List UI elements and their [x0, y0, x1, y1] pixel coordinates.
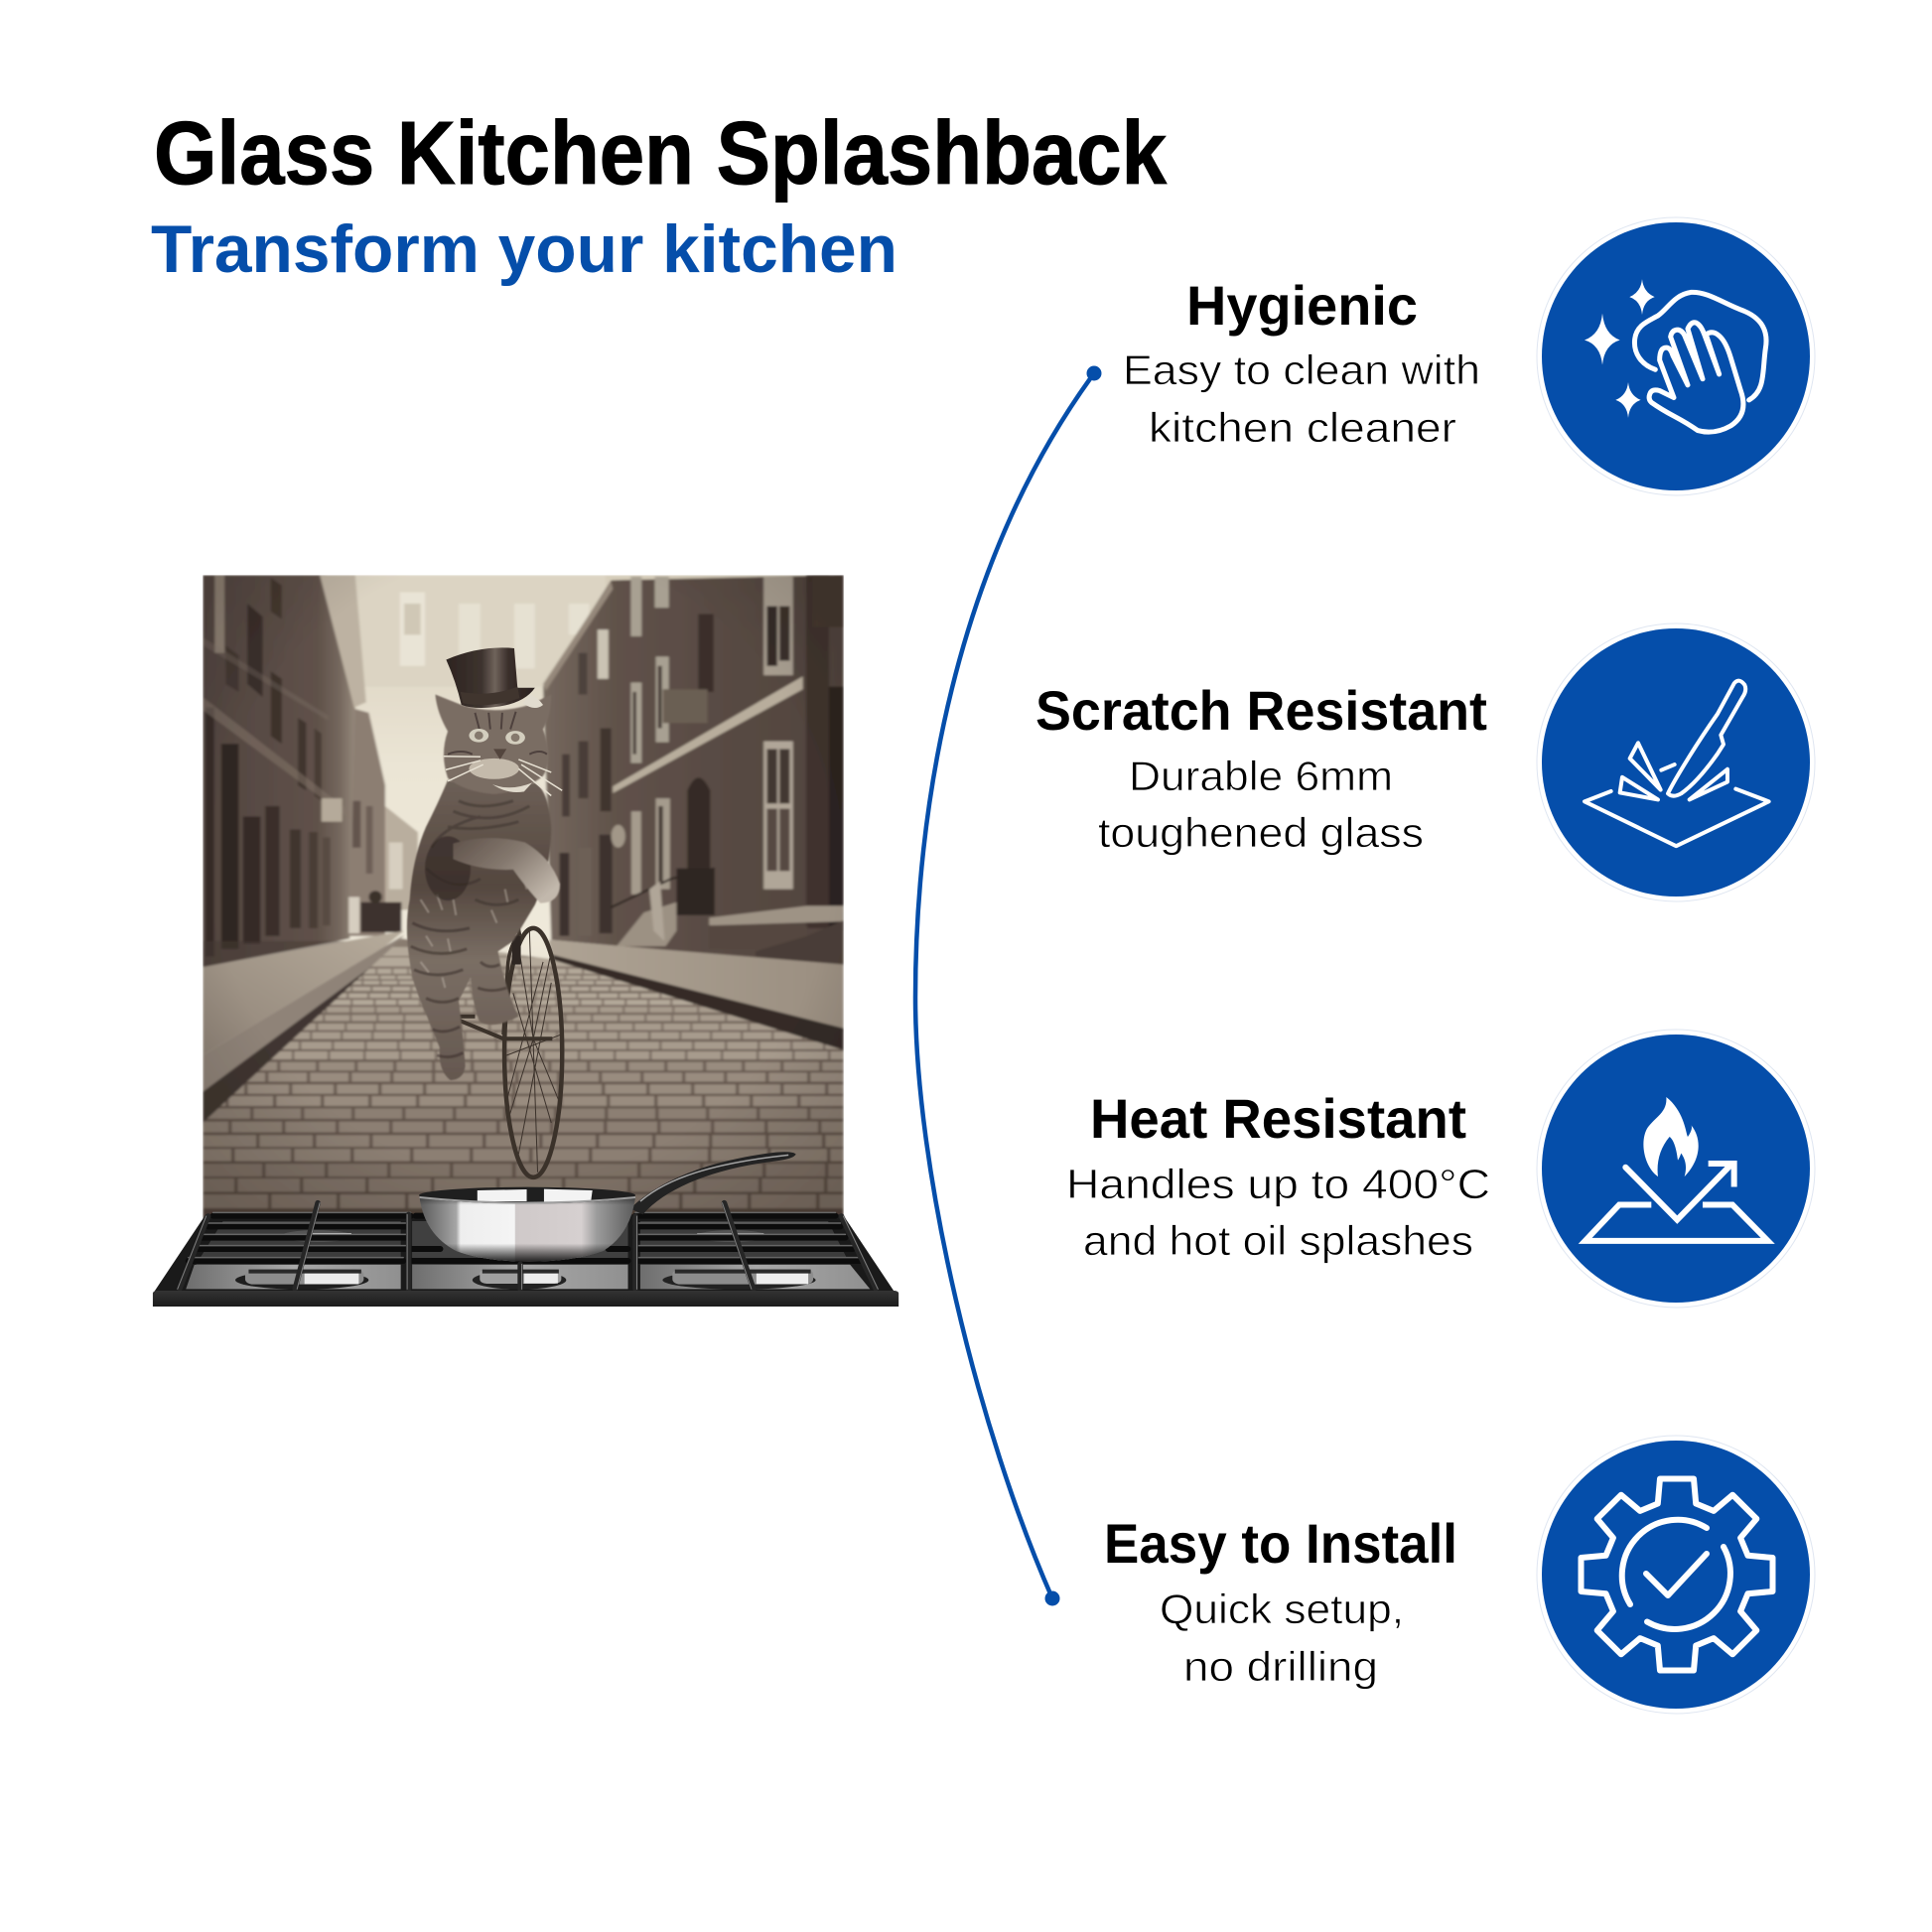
- right sidewalk and curb: [549, 940, 844, 1051]
- heading: Hygienic: [1186, 274, 1418, 337]
- cat fur stripes: [411, 801, 529, 1057]
- description: [1066, 1161, 1490, 1264]
- heading: Easy to Install: [1104, 1512, 1457, 1575]
- title: Glass Kitchen Splashback: [154, 104, 1168, 204]
- icon: gear with check mark: [1537, 1436, 1815, 1714]
- top hat: [446, 647, 543, 708]
- cat raised arm and paw: [454, 838, 560, 903]
- distant building with windows: [349, 575, 606, 936]
- description: kitchen cleaner: [1149, 404, 1456, 451]
- cobbled road: [203, 938, 844, 1219]
- hob surface: [154, 1214, 895, 1293]
- feature: hygienic: [1123, 274, 1480, 451]
- feature: heat resistant: [1066, 1087, 1490, 1264]
- description: Durable 6mm: [1129, 753, 1393, 799]
- pan rim: [419, 1187, 635, 1203]
- subtitle: Transform your kitchen: [151, 211, 897, 287]
- connector curve with end dots: [915, 365, 1102, 1606]
- description: Handles up to 400°C: [1066, 1161, 1490, 1207]
- gas hob: [153, 1152, 898, 1307]
- heading: Scratch Resistant: [1035, 679, 1487, 742]
- cat body: [407, 780, 551, 1080]
- sky: [264, 575, 804, 959]
- hob front band: [153, 1291, 898, 1307]
- description: [1098, 753, 1424, 856]
- description: [1123, 346, 1480, 451]
- description: Quick setup,: [1160, 1586, 1404, 1632]
- right building: [543, 575, 844, 966]
- icon: knife scratching glass: [1537, 623, 1815, 901]
- icon: flame over glass with arrow: [1537, 1030, 1815, 1308]
- feature: easy to install: [1104, 1512, 1457, 1690]
- description: Easy to clean with: [1123, 346, 1480, 393]
- icon: hand wiping with sparkles: [1537, 217, 1815, 495]
- photo vignette: [203, 575, 844, 1219]
- splashback photo: cat on a unicycle in a cobbled street: [203, 575, 844, 1219]
- cat head: [435, 695, 551, 794]
- cat face markings: [444, 712, 562, 796]
- steel burner plates: [186, 1221, 870, 1289]
- hob grates: [178, 1203, 878, 1289]
- unicycle: [460, 925, 564, 1179]
- burners: [235, 1230, 816, 1290]
- left sidewalk and curb: [203, 930, 404, 1126]
- description: and hot oil splashes: [1083, 1217, 1473, 1264]
- frying pan: [419, 1152, 796, 1262]
- feature: scratch resistant: [1035, 679, 1487, 856]
- distant pedestrians: [348, 891, 401, 933]
- heading: Heat Resistant: [1090, 1087, 1466, 1150]
- pan bowl: [420, 1197, 635, 1262]
- left building: [203, 575, 366, 967]
- pan handle: [630, 1152, 796, 1214]
- description: [1160, 1586, 1404, 1690]
- description: toughened glass: [1098, 809, 1424, 856]
- description: no drilling: [1183, 1643, 1378, 1690]
